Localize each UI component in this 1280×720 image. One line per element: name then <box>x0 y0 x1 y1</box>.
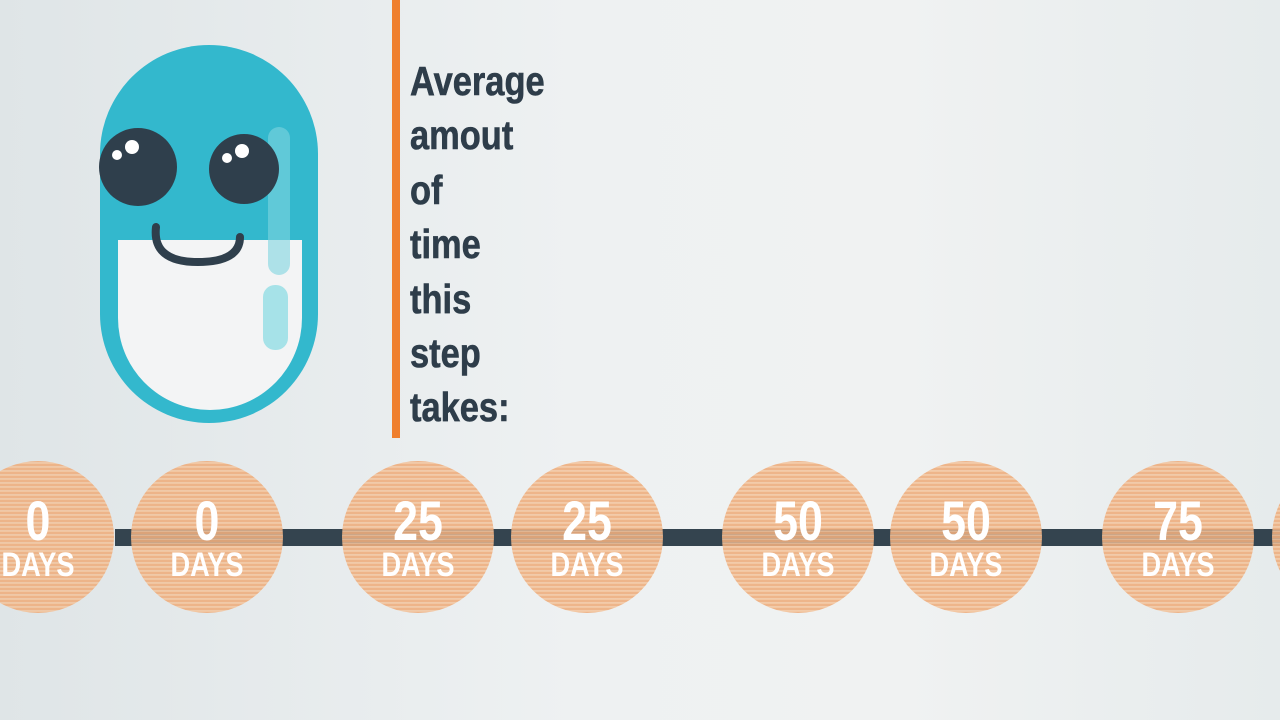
circle: partial right <box>1272 461 1280 613</box>
circle: 25 days <box>342 461 494 613</box>
heading: average amount of time <box>410 59 545 431</box>
circle: 25 days: 25 <box>562 489 612 552</box>
circle: 50 days: DAYS <box>761 545 835 584</box>
circle: 50 days: 50 <box>941 489 991 552</box>
icon: pill character <box>99 45 318 423</box>
circle: 50 days: DAYS <box>929 545 1003 584</box>
circle: 25 days <box>511 461 663 613</box>
heading: average amount of time: step <box>410 331 481 377</box>
heading: average amount of time: takes: <box>410 385 510 431</box>
circle: 0 days: 0 <box>26 489 50 552</box>
circle: 25 days: DAYS <box>381 545 455 584</box>
circle: 0 days <box>131 461 283 613</box>
circle: 50 days <box>722 461 874 613</box>
heading: average amount of time: of <box>410 168 443 214</box>
circle: 0 days <box>0 461 114 613</box>
circle: 25 days: DAYS <box>550 545 624 584</box>
timeline circles <box>0 461 1280 613</box>
circle: 75 days: DAYS <box>1141 545 1215 584</box>
heading: average amount of time: Average <box>410 59 545 105</box>
circle: 0 days: 0 <box>195 489 219 552</box>
circle: 0 days: DAYS <box>1 545 75 584</box>
circle: 75 days <box>1102 461 1254 613</box>
circle: 25 days: 25 <box>393 489 443 552</box>
circle: 50 days <box>890 461 1042 613</box>
circle: 50 days: 50 <box>773 489 823 552</box>
timeline line <box>115 529 1280 546</box>
divider bar: orange <box>392 0 400 438</box>
heading: average amount of time: this <box>410 277 471 323</box>
heading: average amount of time: amout <box>410 113 514 159</box>
circle: 75 days: 75 <box>1153 489 1203 552</box>
heading: average amount of time: time <box>410 222 481 268</box>
circle: 0 days: DAYS <box>170 545 244 584</box>
